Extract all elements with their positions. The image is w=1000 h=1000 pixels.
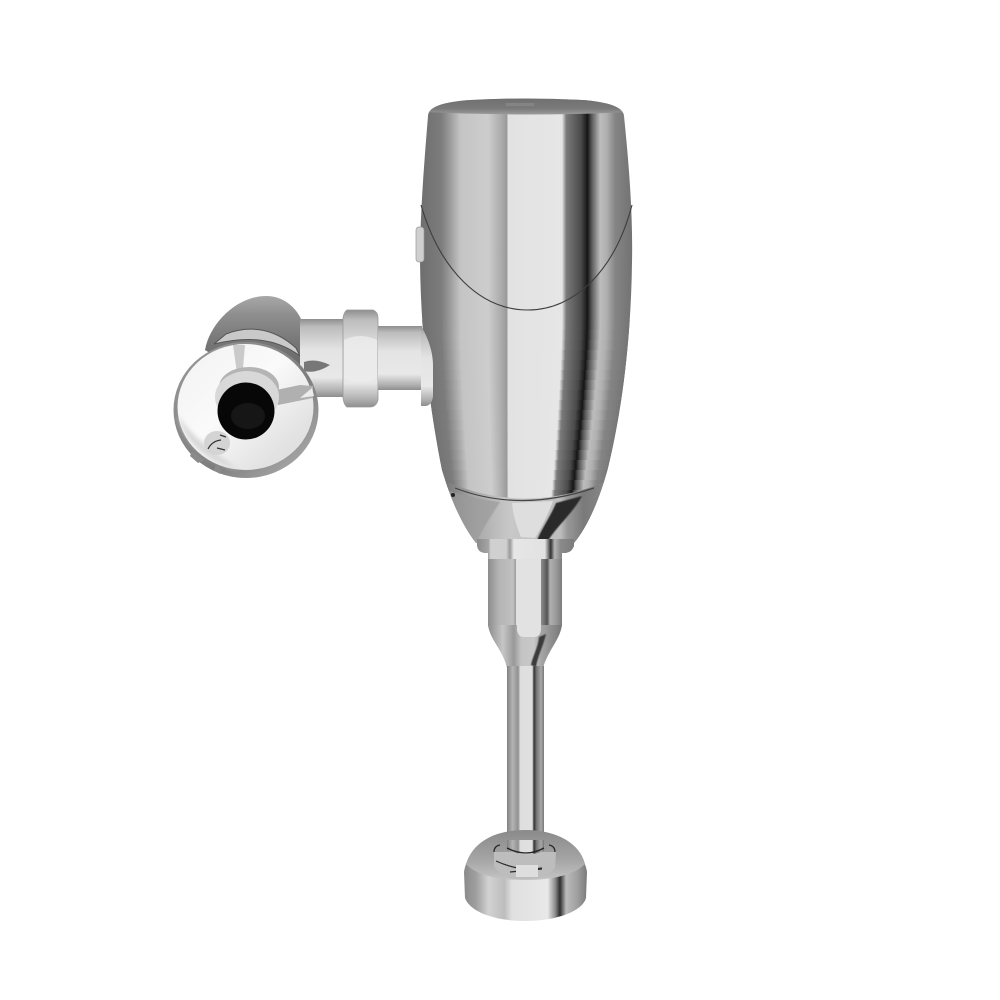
inner collar (494, 852, 556, 879)
illustration: chrome sensor flush valve (174, 98, 632, 921)
tube band (488, 546, 562, 559)
base top dome (466, 830, 585, 880)
tube foot (507, 840, 544, 854)
body: valve housing (415, 95, 640, 560)
base side (464, 830, 587, 921)
spoke highlight (300, 388, 314, 398)
disc rim (174, 342, 318, 478)
narrow tube (507, 666, 544, 856)
disc face (178, 344, 314, 470)
top logo mark (506, 103, 534, 106)
inner collar rings (494, 845, 555, 872)
tube taper (488, 625, 562, 668)
rim notch (190, 451, 222, 474)
top cap shading (429, 98, 623, 114)
lower cap dark sweep (536, 496, 582, 539)
tube central highlight (516, 556, 541, 637)
seam: upper shell (421, 205, 632, 310)
ring around opening (219, 367, 279, 407)
disc inner shading (178, 415, 238, 469)
floor flange base (464, 830, 587, 921)
converging chrome reflections, lower body (415, 320, 640, 511)
screw (204, 431, 230, 455)
pipe right of nut (378, 326, 422, 390)
right spoke (276, 385, 313, 405)
seam: lower shell (455, 488, 594, 500)
tube highlight over taper (517, 620, 541, 637)
pipe detail highlight (304, 361, 330, 372)
ring inner (215, 371, 279, 423)
mounting flange (421, 326, 433, 406)
taper dark sweep (531, 634, 546, 667)
side button (416, 227, 424, 262)
disc spokes (233, 345, 245, 380)
elbow casting (205, 296, 308, 372)
escutcheon disc with sensor opening (174, 342, 318, 478)
nut facet (344, 336, 377, 382)
hex nut (343, 310, 378, 407)
sensor depth shading (231, 403, 265, 429)
collar (477, 539, 574, 553)
small dot (451, 493, 455, 497)
elbow highlight ring (214, 329, 300, 356)
drain riser tube (477, 539, 574, 856)
lower cap centre highlight (512, 501, 553, 538)
connector: inlet elbow and pipe (205, 296, 422, 407)
lower cap left shading (447, 490, 500, 545)
tube foot line (507, 848, 544, 853)
screw slot (208, 435, 226, 450)
collar tab (516, 865, 538, 877)
lower cap (446, 482, 604, 543)
wide tube (488, 553, 562, 626)
sensor opening (218, 382, 274, 440)
pipe left of nut (300, 319, 345, 397)
